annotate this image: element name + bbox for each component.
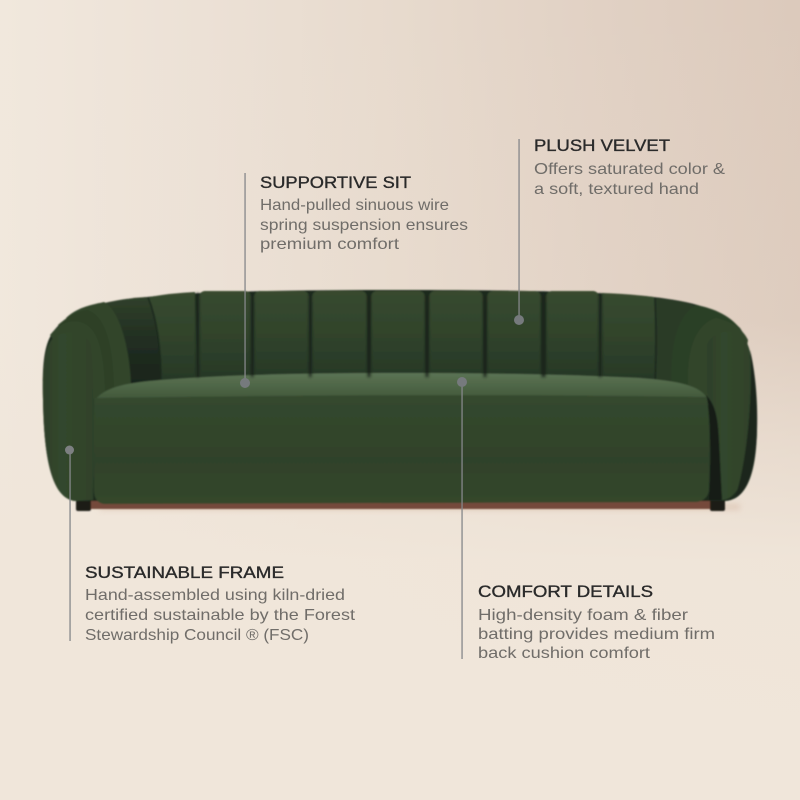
description: Hand-assembled using kiln-dried <box>85 587 345 604</box>
description <box>534 161 725 198</box>
heading: COMFORT DETAILS <box>478 583 653 601</box>
description: Hand-pulled sinuous wire <box>260 197 449 214</box>
shadow creases <box>196 293 602 377</box>
sofa <box>43 290 757 511</box>
heading: SUPPORTIVE SIT <box>260 174 411 192</box>
leader line and dot <box>514 139 524 325</box>
leader line and dot <box>65 446 74 641</box>
sofa base and legs <box>76 498 725 511</box>
callout: sustainable frame <box>65 446 356 644</box>
description <box>478 607 715 662</box>
callout: comfort details <box>457 377 715 662</box>
description: a soft, textured hand <box>534 181 699 198</box>
callout: plush velvet <box>514 137 725 325</box>
heading: PLUSH VELVET <box>534 137 670 155</box>
description: premium comfort <box>260 236 400 253</box>
description: Offers saturated color & <box>534 161 725 178</box>
description: batting provides medium firm <box>478 626 715 643</box>
description: High-density foam & fiber <box>478 607 689 624</box>
leader line and dot <box>457 377 467 659</box>
left arm channels <box>43 302 131 501</box>
description: Stewardship Council ® (FSC) <box>85 627 309 644</box>
description <box>85 587 356 644</box>
description <box>260 197 468 253</box>
sofa back silhouette <box>43 290 757 501</box>
right arm channels <box>671 305 757 500</box>
callout: supportive sit <box>240 173 468 388</box>
back channels <box>100 291 694 386</box>
seat cushion top <box>94 373 708 405</box>
description: certified sustainable by the Forest <box>85 607 356 624</box>
description: back cushion comfort <box>478 645 651 662</box>
leader line and dot <box>240 173 250 388</box>
description: spring suspension ensures <box>260 217 468 234</box>
shadow between seat and right arm <box>706 395 722 500</box>
heading: SUSTAINABLE FRAME <box>85 564 284 582</box>
seat front <box>94 395 710 504</box>
